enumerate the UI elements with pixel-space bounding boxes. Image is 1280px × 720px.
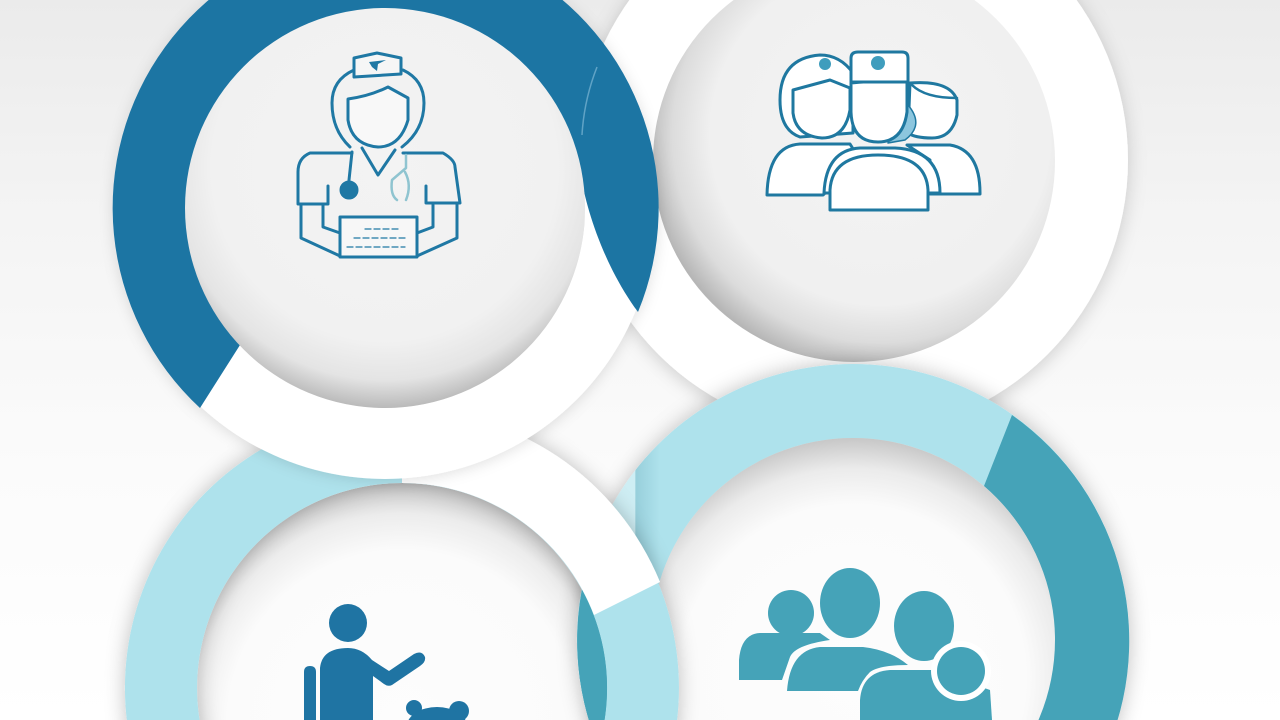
inner disc top left xyxy=(185,8,585,408)
ring with light-blue and white sectors xyxy=(125,409,679,720)
ring with teal and light-blue sectors xyxy=(577,364,1129,720)
faint overlap arc on blue ring xyxy=(582,67,597,135)
icon: nurse with clipboard xyxy=(298,53,460,257)
panel: bottom-right ring xyxy=(577,364,1129,720)
icon: caregiver with child xyxy=(304,604,469,720)
panel: top-right ring xyxy=(578,0,1128,435)
inner disc bottom right xyxy=(651,438,1055,720)
white ring top right xyxy=(578,0,1128,435)
icon: family group xyxy=(739,568,992,720)
icon: nurses group outline xyxy=(767,52,980,210)
inner disc top right xyxy=(653,0,1055,362)
inner disc bottom left xyxy=(197,483,607,720)
ring with blue and white sectors xyxy=(113,0,659,479)
panel: top-left ring xyxy=(113,0,659,479)
panel: bottom-left ring xyxy=(114,432,690,720)
pale overlap edge on the ring xyxy=(612,452,652,559)
teal ring sliver seen through the hole xyxy=(577,590,607,720)
